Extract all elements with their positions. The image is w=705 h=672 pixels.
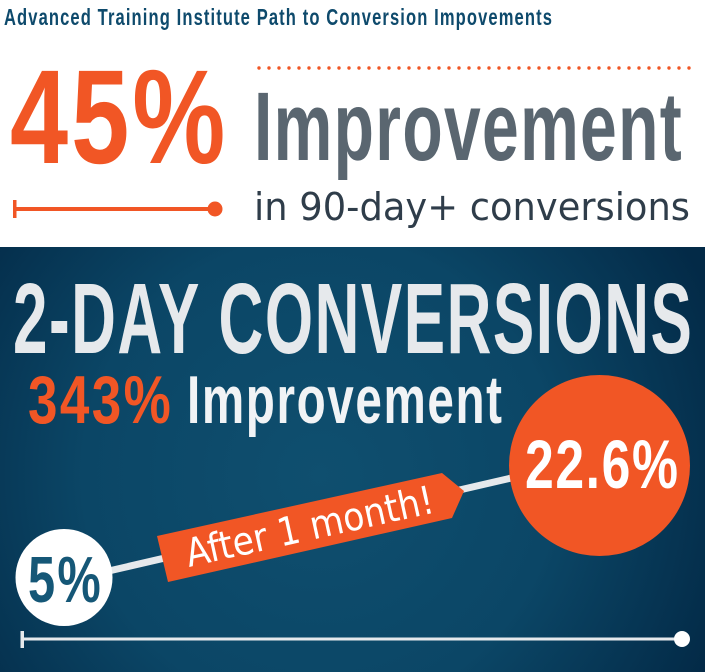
heading: 2-DAY CONVERSIONS: 2-DAY CONVERSIONS <box>13 263 692 375</box>
subheading: in 90-day+ conversions: in 90-day+ conversions <box>254 185 690 229</box>
label: Improvement: Improvement <box>187 363 502 438</box>
title: Advanced Training Institute Path to Conversion Impovements <box>4 5 552 31</box>
dotted divider <box>259 66 691 70</box>
timeline: orange <box>13 200 222 218</box>
tag: After 1 month!: After 1 month! <box>181 478 438 577</box>
heading: Improvement: Improvement <box>254 72 682 181</box>
start marker: 5%: 5% <box>28 544 101 617</box>
trend line <box>100 476 520 573</box>
end marker: 22.6%: 22.6% <box>525 426 678 503</box>
end marker: 22.6% <box>509 375 690 556</box>
panel: 2-day conversions <box>0 247 705 672</box>
timeline: white <box>20 631 690 648</box>
stat: 343%: 343% <box>28 362 171 437</box>
start marker: 5% <box>16 529 112 626</box>
big stat: 45%: 45% <box>10 43 225 192</box>
